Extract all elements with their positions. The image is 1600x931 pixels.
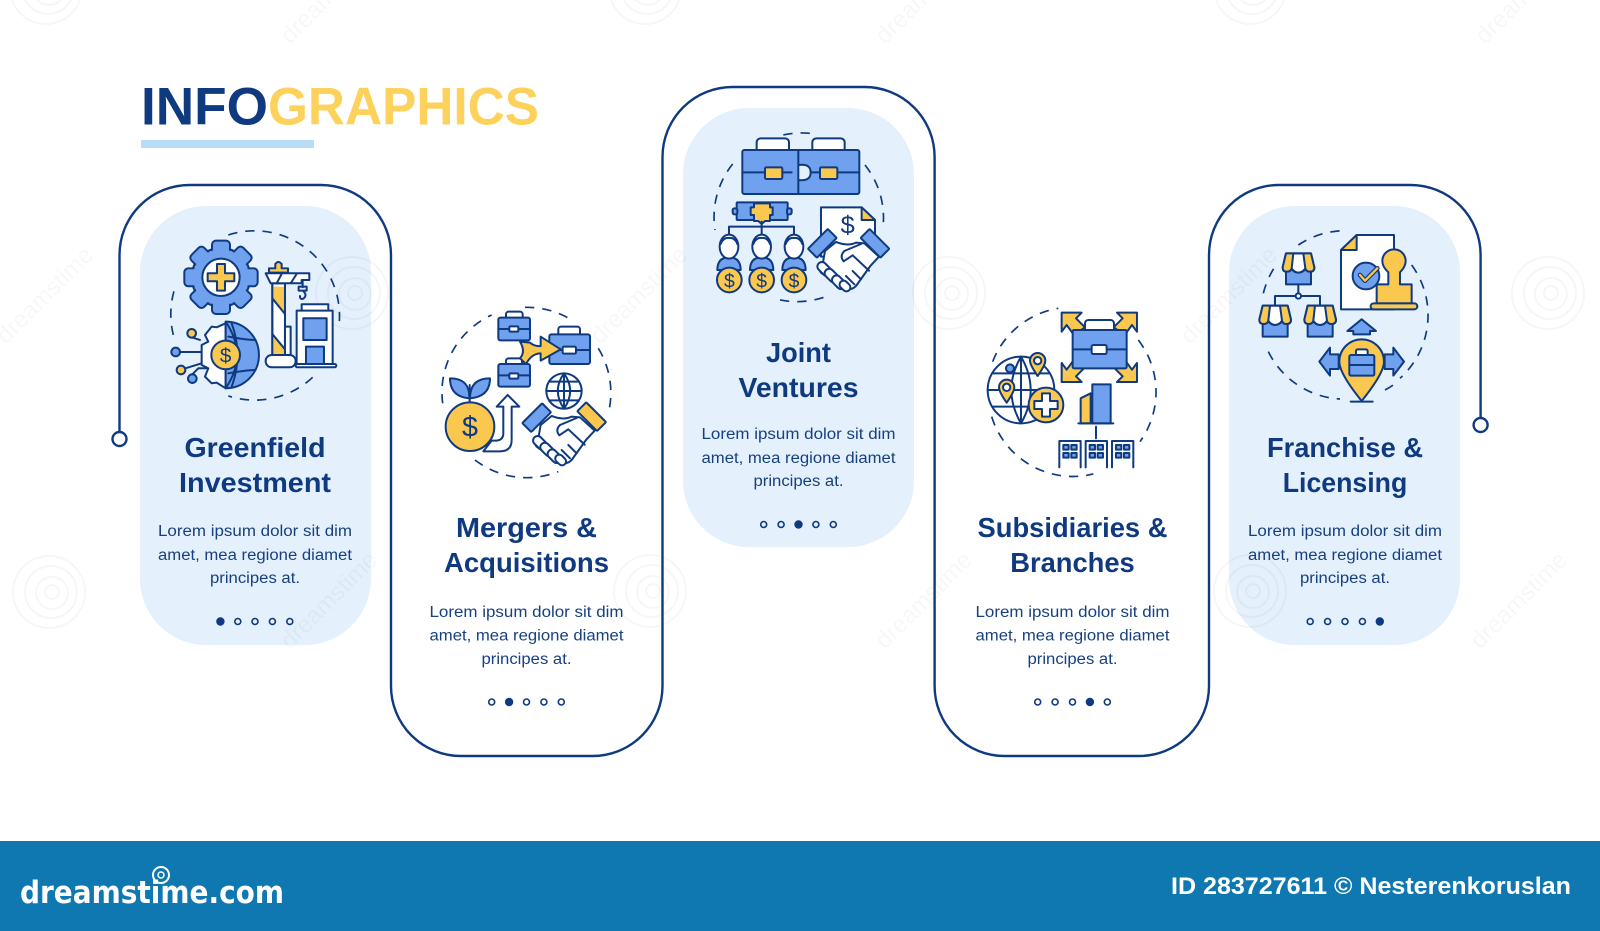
icon: joint ventures: $ (841, 211, 855, 239)
text: subsidiaries description: principes at. (1028, 651, 1118, 668)
icon: franchise and licensing (1259, 231, 1428, 402)
heading: joint ventures: Ventures (738, 372, 858, 403)
title (141, 78, 539, 136)
text: joint ventures description: amet, mea regione diamet (702, 450, 896, 467)
panel: greenfield background (140, 206, 371, 645)
footer logo: dreamstime.com (20, 875, 284, 911)
heading: greenfield investment: Investment (179, 467, 331, 498)
heading: subsidiaries and branches: Branches (1010, 547, 1135, 578)
panel: joint ventures background (683, 108, 914, 547)
text: subsidiaries description: amet, mea regione diamet (976, 628, 1170, 644)
title: INFO (141, 78, 268, 136)
text: mergers description: principes at. (482, 651, 572, 668)
heading: joint ventures (738, 337, 858, 403)
text: subsidiaries description (976, 604, 1170, 668)
text: greenfield description: Lorem ipsum dolor sit dim (158, 523, 352, 540)
text: joint ventures description: principes at. (754, 473, 844, 490)
text: mergers description (430, 604, 624, 668)
title: GRAPHICS (268, 78, 539, 136)
heading: subsidiaries and branches (978, 512, 1168, 578)
icon: joint ventures (714, 133, 889, 302)
text: joint ventures description (702, 426, 896, 490)
watermark: dreamstime (870, 546, 978, 654)
icon: greenfield investment: $ (220, 344, 232, 367)
footer bar (0, 841, 1600, 931)
pagination dots 5 (1307, 618, 1383, 625)
text: joint ventures description: Lorem ipsum dolor sit dim (702, 426, 896, 443)
icon: mergers and acquisitions: $ (462, 412, 478, 444)
heading: joint ventures: Joint (766, 337, 831, 368)
text: greenfield description: principes at. (210, 570, 300, 587)
icon: mergers and acquisitions (442, 307, 611, 478)
text: franchise description: principes at. (1300, 570, 1390, 587)
text: mergers description: Lorem ipsum dolor sit dim (430, 604, 624, 621)
pagination dots 1 (217, 618, 293, 625)
heading: mergers and acquisitions (444, 512, 609, 578)
icon: greenfield investment (171, 231, 340, 400)
heading: subsidiaries and branches: Subsidiaries & (978, 512, 1168, 543)
watermark: dreamstime (1465, 546, 1573, 654)
heading: mergers and acquisitions: Acquisitions (444, 547, 609, 578)
pagination dots 2 (489, 699, 564, 705)
text: franchise description: amet, mea regione diamet (1248, 547, 1443, 564)
heading: franchise and licensing: Licensing (1283, 467, 1407, 498)
text: greenfield description (158, 523, 353, 587)
heading: greenfield investment (179, 432, 331, 498)
heading: mergers and acquisitions: Mergers & (456, 512, 597, 543)
footer credit: ID 283727611 © Nesterenkoruslan (1171, 873, 1571, 900)
text: subsidiaries description: Lorem ipsum dolor sit dim (976, 604, 1170, 621)
pagination dots 4 (1035, 699, 1110, 705)
title underline (141, 140, 314, 148)
heading: greenfield investment: Greenfield (184, 432, 326, 463)
icon: subsidiaries and branches (988, 308, 1156, 476)
heading: franchise and licensing: Franchise & (1267, 432, 1423, 463)
panel: franchise background (1229, 206, 1460, 645)
text: franchise description: Lorem ipsum dolor sit dim (1248, 523, 1442, 540)
watermark (0, 0, 1584, 654)
text: greenfield description: amet, mea regione diamet (158, 547, 353, 564)
text: mergers description: amet, mea regione diamet (430, 628, 624, 644)
watermark: dreamstime (1175, 241, 1283, 349)
watermark: dreamstime (585, 241, 693, 349)
serpentine outline connecting all five cards (112, 87, 1488, 756)
pagination dots 3 (761, 521, 836, 528)
text: franchise description (1248, 523, 1443, 587)
heading: franchise and licensing (1267, 432, 1423, 498)
watermark: dreamstime (275, 546, 383, 654)
